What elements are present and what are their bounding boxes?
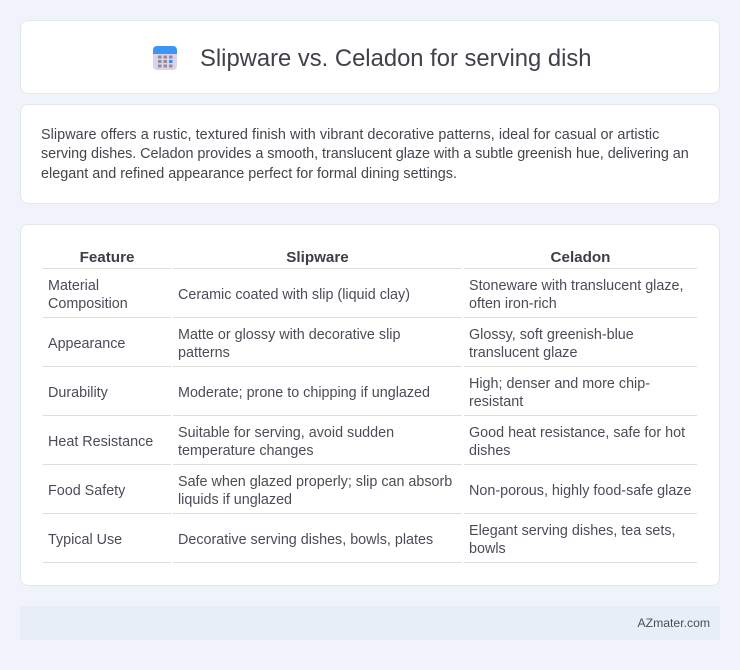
intro panel — [20, 104, 720, 204]
icon: calendar — [153, 46, 177, 70]
title: Slipware vs. Celadon for serving dish — [200, 45, 592, 72]
comparison table: Suitable for serving, avoid sudden — [178, 425, 394, 441]
comparison table panel — [20, 224, 720, 586]
comparison table: Moderate; prone to chipping if unglazed — [178, 385, 430, 401]
comparison table: Durability — [48, 385, 108, 401]
row: Appearance — [48, 327, 634, 361]
comparison table: Matte or glossy with decorative slip — [178, 327, 400, 343]
comparison table: Elegant serving dishes, tea sets, — [469, 523, 676, 539]
comparison table: Stoneware with translucent glaze, — [469, 278, 683, 294]
row: Typical Use — [48, 523, 676, 557]
row: Material Composition — [48, 278, 683, 312]
comparison table: often iron-rich — [469, 296, 557, 312]
intro text: serving dishes. Celadon provides a smooth, translucent glaze with a subtle greenish hue, delivering an — [41, 146, 689, 162]
comparison table: Appearance — [48, 336, 125, 352]
column heading: Feature: Feature — [80, 249, 134, 266]
comparison table: Glossy, soft greenish-blue — [469, 327, 634, 343]
comparison table: bowls — [469, 541, 506, 557]
comparison table: translucent glaze — [469, 345, 577, 361]
row: Heat Resistance — [48, 425, 685, 459]
comparison table: Material — [48, 278, 99, 294]
comparison table: Food Safety — [48, 483, 125, 499]
column heading: Celadon: Celadon — [551, 249, 610, 266]
comparison table: Non-porous, highly food-safe glaze — [469, 483, 691, 499]
comparison table: liquids if unglazed — [178, 492, 292, 508]
comparison table: resistant — [469, 394, 523, 410]
row: Food Safety — [48, 474, 691, 508]
comparison table: temperature changes — [178, 443, 314, 459]
intro text: elegant and refined appearance perfect for formal dining settings. — [41, 166, 457, 182]
footer bar — [20, 606, 720, 640]
comparison table: Good heat resistance, safe for hot — [469, 425, 685, 441]
comparison table: Safe when glazed properly; slip can absorb — [178, 474, 452, 490]
comparison table: Composition — [48, 296, 128, 312]
comparison table: Typical Use — [48, 532, 122, 548]
intro text — [41, 127, 689, 182]
header panel — [20, 20, 720, 94]
row: Durability — [48, 376, 650, 410]
column heading: Slipware: Slipware — [286, 249, 349, 266]
footer credit: AZmater.com — [638, 616, 710, 630]
comparison table: Ceramic coated with slip (liquid clay) — [178, 287, 410, 303]
comparison table: patterns — [178, 345, 230, 361]
comparison table: Decorative serving dishes, bowls, plates — [178, 532, 433, 548]
comparison table: dishes — [469, 443, 510, 459]
comparison table: High; denser and more chip- — [469, 376, 650, 392]
comparison table: Heat Resistance — [48, 434, 153, 450]
intro text: Slipware offers a rustic, textured finish with vibrant decorative patterns, ideal for casual or artistic — [41, 127, 659, 143]
